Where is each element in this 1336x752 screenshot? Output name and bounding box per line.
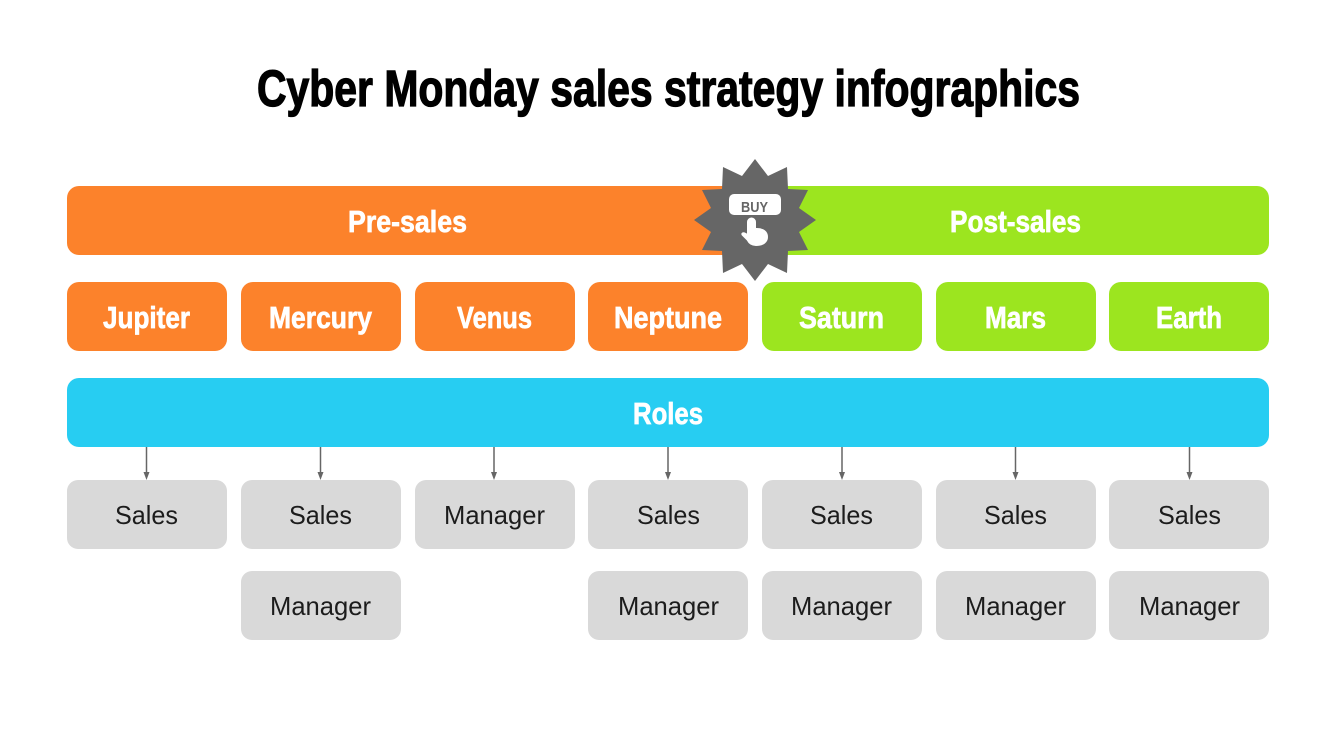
arrow — [318, 447, 324, 480]
role box: Sales 1: Sales — [115, 500, 178, 530]
panel: pre-sales bar — [67, 186, 757, 255]
role box: Sales 5: Sales — [810, 500, 873, 530]
role box: Sales 6: Sales — [984, 500, 1047, 530]
role box: Manager 7 — [1109, 571, 1269, 640]
panel: Jupiter: Jupiter — [103, 300, 190, 335]
panel: roles bar: Roles — [633, 396, 703, 431]
panel: post-sales bar — [740, 186, 1269, 255]
arrow — [1186, 447, 1192, 480]
panel: post-sales bar: Post-sales — [950, 204, 1081, 239]
panel: Saturn — [762, 282, 922, 351]
role box: Manager 2: Manager — [270, 591, 371, 621]
arrow — [1012, 447, 1018, 480]
role box: Sales 1 — [67, 480, 227, 549]
icon: buy badge: BUY — [741, 199, 768, 216]
role box: Manager 5: Manager — [791, 591, 892, 621]
arrow — [839, 447, 845, 480]
role box: Manager 6 — [936, 571, 1096, 640]
role box: Manager 3: Manager — [444, 500, 545, 530]
panel: Mercury: Mercury — [269, 300, 373, 335]
role box: Sales 7: Sales — [1158, 500, 1221, 530]
role box: Manager 7: Manager — [1139, 591, 1240, 621]
panel: pre-sales bar: Pre-sales — [348, 204, 467, 239]
role box: Manager 4 — [588, 571, 748, 640]
title: Cyber Monday sales strategy infographics — [257, 60, 1080, 117]
role box: Sales 2: Sales — [289, 500, 352, 530]
role box: Manager 3 — [415, 480, 575, 549]
role box: Manager 2 — [241, 571, 401, 640]
panel: Earth: Earth — [1156, 300, 1222, 335]
role box: Manager 4: Manager — [618, 591, 719, 621]
panel: Neptune: Neptune — [614, 300, 722, 335]
panel: Earth — [1109, 282, 1269, 351]
panel: Venus — [415, 282, 575, 351]
role box: Sales 5 — [762, 480, 922, 549]
arrow — [144, 447, 150, 480]
role box: Sales 6 — [936, 480, 1096, 549]
panel: roles bar — [67, 378, 1269, 447]
role box: Sales 2 — [241, 480, 401, 549]
panel: Mars — [936, 282, 1096, 351]
panel: Neptune — [588, 282, 748, 351]
panel: Venus: Venus — [457, 300, 532, 335]
icon: buy badge — [694, 159, 816, 281]
panel: Mars: Mars — [985, 300, 1046, 335]
panel: Jupiter — [67, 282, 227, 351]
role box: Sales 7 — [1109, 480, 1269, 549]
role box: Manager 6: Manager — [965, 591, 1066, 621]
role box: Sales 4: Sales — [637, 500, 700, 530]
panel: Mercury — [241, 282, 401, 351]
arrow — [491, 447, 497, 480]
panel: Saturn: Saturn — [799, 300, 884, 335]
role box: Sales 4 — [588, 480, 748, 549]
arrow — [665, 447, 671, 480]
role box: Manager 5 — [762, 571, 922, 640]
